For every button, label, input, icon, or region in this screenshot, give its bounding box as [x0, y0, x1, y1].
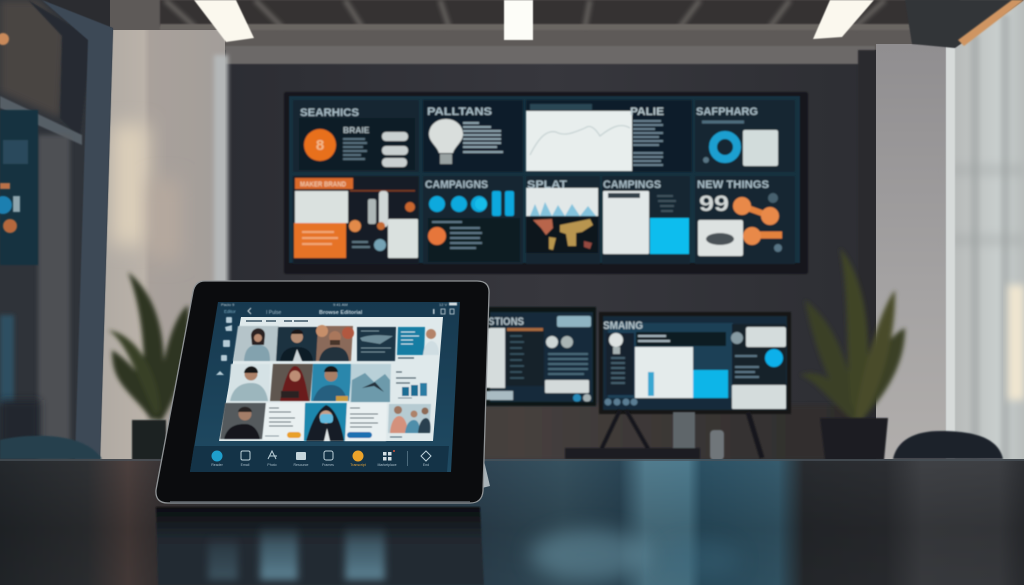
ceiling lights — [194, 0, 874, 42]
donut chart — [713, 135, 737, 159]
dock icon: frame — [322, 451, 334, 467]
panel: searches: SEARHICS — [300, 107, 359, 119]
secondary monitor: right: SMAING — [603, 320, 643, 332]
tablet body — [156, 281, 489, 503]
top toolbar: Editor — [224, 309, 236, 314]
thumbnail: man in suit — [276, 327, 318, 361]
room background — [43, 0, 1024, 459]
right window — [946, 0, 1024, 470]
panel: campaigns — [423, 176, 523, 264]
thumbnail: bearded man with glasses — [316, 325, 354, 361]
panel: new things: 99 — [699, 191, 729, 216]
dock icon: folder — [294, 452, 309, 467]
top toolbar: Browse Editorial — [319, 310, 363, 316]
left plant — [108, 272, 189, 460]
status bar — [221, 302, 457, 307]
thumbnail: blue promo with woman — [397, 327, 439, 358]
panel: palltans — [423, 100, 523, 172]
right wall — [876, 44, 946, 462]
gallery row 1 — [233, 325, 439, 361]
status bar: 9:41 AM — [333, 302, 348, 307]
panel: splat with world map — [526, 176, 600, 264]
panel: campaigns: CAMPAIGNS — [425, 179, 488, 191]
text card with orange button — [263, 403, 305, 440]
tablet reflection on table — [156, 507, 484, 585]
tablet screen — [190, 302, 460, 472]
thumbnail: man on blue background — [311, 364, 352, 401]
panel: palltans: PALLTANS — [427, 106, 492, 118]
thumbnail: man in shirt — [228, 364, 270, 401]
dock icon: folder: Resource — [294, 463, 309, 467]
secondary monitor: left: STIONS — [488, 316, 524, 328]
gallery row 3 — [220, 403, 431, 441]
status bar: 12 V — [439, 302, 448, 307]
thumbnail: red-haired woman — [270, 364, 313, 401]
dock icon: active orange: Transcript — [350, 463, 366, 467]
content sheet — [219, 317, 443, 441]
thumbnail: dark landscape card — [357, 327, 396, 361]
thumbnail: bar chart card — [391, 365, 435, 401]
thumbnail: woman portrait — [233, 326, 279, 361]
world map — [533, 219, 553, 235]
right chair — [893, 431, 1003, 459]
text card with blue button — [345, 403, 387, 441]
panel: searches: BRAIE — [343, 125, 370, 135]
panel: searches: 8 — [316, 137, 324, 154]
panel: campings: CAMPINGS — [603, 179, 661, 191]
monitor stands and desk items — [565, 410, 762, 460]
dock icon: active orange — [350, 450, 366, 467]
dock icon: end: End — [423, 463, 429, 467]
tablet — [156, 281, 489, 504]
panel: safphang with donut: SAFPHARG — [696, 106, 758, 118]
panel: orange report — [293, 176, 419, 264]
panel: line chart and palie: PALIE — [630, 106, 664, 118]
panel: safphang with donut — [695, 100, 795, 172]
ceiling — [110, 0, 1024, 50]
panel: splat with world map: SPLAT — [527, 179, 567, 191]
bottom dock — [190, 446, 449, 472]
dock icon: email: Email — [241, 463, 250, 467]
table — [0, 459, 1024, 585]
panel: new things — [695, 176, 795, 264]
gallery row 2 — [228, 364, 435, 402]
panel: new things: NEW THINGS — [697, 179, 769, 191]
secondary monitor: left — [485, 307, 596, 406]
secondary monitor: right — [599, 312, 791, 414]
dock icon: people: Photo — [267, 463, 277, 467]
dock icon: browser — [211, 450, 224, 467]
panel: orange report: MAKER BRAND — [300, 182, 346, 188]
thumbnail: group of three people — [388, 404, 431, 437]
dock icon: grid: Marketplace — [377, 463, 397, 467]
back wall — [388, 64, 711, 404]
thumbnail: diver over mountains — [350, 364, 391, 402]
tablet stand — [484, 463, 490, 488]
dock icon: email — [241, 451, 250, 467]
dock icon: grid — [377, 450, 397, 467]
right plant — [800, 248, 905, 460]
panel: line chart and palie — [526, 100, 692, 172]
dock icon: end — [421, 451, 431, 467]
dock icon: frame: Frames — [322, 463, 334, 467]
left wall — [100, 30, 225, 460]
dock icon: browser: Reader — [211, 463, 224, 467]
left chair — [0, 436, 102, 459]
icon: light bulb — [429, 119, 463, 153]
thumbnail: woman in blue mask — [304, 403, 347, 441]
panel: campings — [602, 176, 690, 264]
left glass door with reflected screen — [0, 0, 113, 460]
panel: searches — [293, 100, 419, 172]
dock icon: people — [267, 451, 277, 467]
large wall display — [284, 92, 808, 274]
top toolbar: I Pulse — [266, 310, 282, 316]
status bar: Pacio 9 — [221, 302, 235, 307]
thumbnail: man with glasses — [220, 403, 266, 439]
sidebar icons — [216, 317, 232, 375]
ceiling corner with warm strip — [905, 0, 1024, 48]
top toolbar — [224, 308, 454, 316]
